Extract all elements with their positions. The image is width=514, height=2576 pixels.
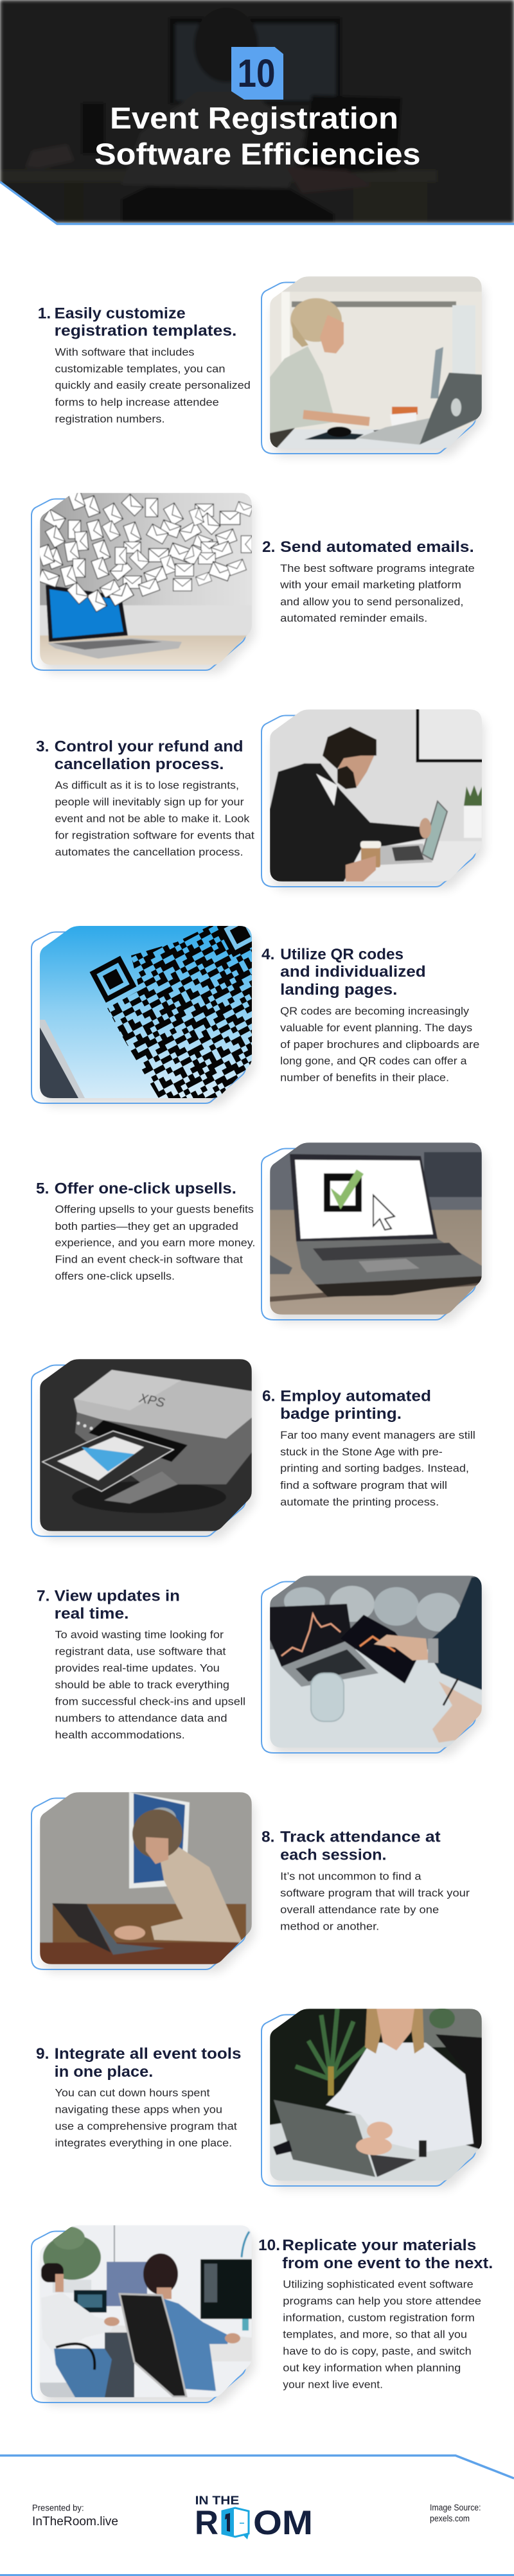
item 9 body text: You can cut down hours spent <box>55 2087 210 2099</box>
item 7 <box>37 1576 484 1755</box>
item 3 <box>36 706 488 889</box>
item 7 body text: health accommodations. <box>55 1729 185 1741</box>
item 4 heading: and individualized <box>280 963 426 981</box>
item 10 body text: information, custom registration form <box>283 2312 475 2323</box>
item 9 body text <box>55 2087 237 2149</box>
image source credit <box>430 2503 481 2523</box>
item 5 body text: experience, and you earn more money. <box>55 1238 255 1249</box>
item 9 body text: use a comprehensive program that <box>55 2120 237 2132</box>
item 2 body text: with your email marketing platform <box>279 580 461 591</box>
item 8 heading: 8. <box>261 1829 274 1846</box>
item 9 body text: integrates everything in one place. <box>55 2137 232 2149</box>
item 1 heading <box>38 305 236 340</box>
item 1 body text: customizable templates, you can <box>55 364 225 375</box>
item 10 body text: programs can help you store attendee <box>283 2296 481 2307</box>
logo: In The Room: R <box>195 2504 218 2542</box>
item 4 heading: Utilize QR codes <box>280 946 403 963</box>
item 5 body text: Find an event check-in software that <box>55 1254 243 1266</box>
item 1 body text: With software that includes <box>55 346 194 358</box>
item 2 body text: and allow you to send personalized, <box>280 596 463 608</box>
item 3 body text: automates the cancellation process. <box>55 847 244 858</box>
title <box>94 101 421 171</box>
item 8 heading: each session. <box>280 1846 387 1863</box>
item 2 photo: envelopes flying from laptop <box>31 488 254 673</box>
item 2 heading: 2. <box>262 538 275 556</box>
header background photo <box>0 0 514 223</box>
item 4 body text: QR codes are becoming increasingly <box>280 1006 470 1017</box>
item 6 heading: 6. <box>262 1387 275 1405</box>
item 1 <box>38 276 484 456</box>
item 8 body text: method or another. <box>280 1921 379 1932</box>
item 5 heading: Offer one-click upsells. <box>55 1180 236 1197</box>
footer top rule <box>0 2456 514 2478</box>
item 7 heading <box>37 1587 180 1622</box>
item 1 photo: woman at laptop <box>261 276 484 456</box>
item 10 photo: developers at monitors <box>31 2225 254 2405</box>
item 4 <box>31 914 479 1106</box>
item 10 body text: your next live event. <box>283 2379 383 2390</box>
item 8 body text: It’s not uncommon to find a <box>280 1870 422 1882</box>
item 4 heading <box>261 946 426 999</box>
item 3 body text <box>55 780 254 858</box>
presented by credit: InTheRoom.live <box>32 2515 118 2528</box>
item 9 <box>36 2008 484 2189</box>
item 6 photo: photo printer <box>31 1359 254 1539</box>
item 2 body text: The best software programs integrate <box>280 563 475 574</box>
item 1 body text: quickly and easily create personalized <box>55 380 251 391</box>
item 6 heading: badge printing. <box>280 1405 402 1423</box>
item 5 heading: 5. <box>36 1180 49 1197</box>
item 8 body text: software program that will track your <box>280 1888 470 1899</box>
item 7 body text: To avoid wasting time looking for <box>55 1629 224 1640</box>
item 3 body text: for registration software for events that <box>55 830 254 841</box>
item 4 heading: landing pages. <box>280 981 397 999</box>
item 9 heading: Integrate all event tools <box>55 2045 241 2063</box>
item 7 body text: numbers to attendance data and <box>55 1713 227 1725</box>
logo: In The Room <box>195 2494 313 2542</box>
item 2 body text: automated reminder emails. <box>280 613 427 625</box>
item 4 body text: of paper brochures and clipboards are <box>280 1039 479 1051</box>
presented by credit <box>32 2503 118 2528</box>
item 6 <box>31 1359 475 1539</box>
item 10 heading: from one event to the next. <box>282 2255 493 2272</box>
item 2 body text <box>279 563 475 625</box>
item 7 body text: from successful check-ins and upsell <box>55 1696 245 1708</box>
item 2 <box>31 488 475 673</box>
item 4 body text: number of benefits in their place. <box>280 1072 449 1084</box>
item 7 body text: registrant data, use software that <box>55 1646 226 1658</box>
number badge <box>231 47 283 100</box>
item 1 heading: 1. <box>38 305 51 322</box>
item 10 body text: out key information when planning <box>283 2362 461 2374</box>
item 3 heading: Control your refund and <box>55 738 244 756</box>
item 3 body text: event and not be able to make it. Look <box>55 813 250 824</box>
item 10 <box>31 2225 493 2405</box>
item 6 body text: Far too many event managers are still <box>280 1430 475 1441</box>
item 9 photo: woman with laptop and plant <box>261 2008 484 2189</box>
title: Software Efficiencies <box>94 137 421 171</box>
item 8 body text: overall attendance rate by one <box>280 1905 439 1916</box>
item 4 body text: long gone, and QR codes can offer a <box>280 1056 467 1067</box>
item 10 heading <box>258 2237 493 2272</box>
item 9 body text: navigating these apps when you <box>55 2104 222 2116</box>
item 3 photo: man with laptop and coffee <box>261 706 488 889</box>
item 10 body text: Utilizing sophisticated event software <box>283 2279 474 2291</box>
item 1 heading: Easily customize <box>55 305 186 322</box>
item 9 heading: 9. <box>36 2045 49 2063</box>
item 3 body text: people will inevitably sign up for your <box>55 797 244 808</box>
item 5 body text: both parties—they get an upgraded <box>55 1221 238 1232</box>
presented by credit: Presented by: <box>32 2503 84 2513</box>
item 6 body text <box>280 1430 475 1508</box>
item 7 heading: 7. <box>37 1587 49 1604</box>
item 5 body text <box>55 1204 255 1283</box>
item 8 photo: woman typing at table <box>31 1792 254 1972</box>
footer bottom rule <box>0 2574 514 2576</box>
item 7 heading: real time. <box>55 1605 128 1622</box>
logo: In The Room: OM <box>253 2504 313 2542</box>
item 1 body text: forms to help increase attendee <box>55 396 219 408</box>
item 4 body text: valuable for event planning. The days <box>280 1022 472 1034</box>
item 10 heading: Replicate your materials <box>282 2237 476 2254</box>
number badge: 10 <box>238 51 275 95</box>
item 8 body text <box>280 1870 470 1932</box>
item 6 body text: automate the printing process. <box>280 1497 439 1508</box>
item 5 body text: offers one-click upsells. <box>55 1271 175 1283</box>
item 7 photo: stock charts on laptop and tablet <box>261 1576 484 1755</box>
item 10 body text <box>283 2279 481 2390</box>
image source credit: Image Source: <box>430 2503 481 2512</box>
item 1 body text: registration numbers. <box>55 414 165 425</box>
item 7 body text: should be able to track everything <box>55 1679 229 1691</box>
item 6 heading: Employ automated <box>280 1387 431 1405</box>
item 5 photo: laptop with checkbox <box>261 1142 484 1322</box>
header accent edge <box>0 182 514 224</box>
item 3 heading: cancellation process. <box>55 756 224 773</box>
item 2 heading: Send automated emails. <box>280 538 474 556</box>
image source credit: pexels.com <box>430 2514 470 2523</box>
item 8 heading <box>261 1829 441 1863</box>
item 9 heading <box>36 2045 242 2081</box>
footer <box>0 2456 514 2576</box>
item 1 body text <box>55 346 251 425</box>
item 7 body text: provides real-time updates. You <box>55 1663 220 1674</box>
header banner <box>0 0 514 224</box>
item 3 heading: 3. <box>36 738 49 756</box>
item 6 photo: photo printer: XPS <box>137 1391 166 1410</box>
item 8 heading: Track attendance at <box>280 1829 441 1846</box>
item 6 heading <box>262 1387 431 1423</box>
item 3 body text: As difficult as it is to lose registrants, <box>55 780 239 792</box>
item 4 photo: QR code <box>31 914 260 1106</box>
item 4 body text <box>280 1006 479 1084</box>
item 6 body text: printing and sorting badges. Instead, <box>280 1463 469 1475</box>
item 10 body text: have to do is copy, paste, and switch <box>283 2346 472 2358</box>
item 6 body text: stuck in the Stone Age with pre- <box>280 1446 443 1458</box>
item 3 heading <box>36 738 244 773</box>
item 5 <box>36 1142 484 1322</box>
logo: In The Room: IN THE <box>195 2494 239 2507</box>
title: Event Registration <box>110 101 398 135</box>
item 1 heading: registration templates. <box>55 323 236 340</box>
item 4 heading: 4. <box>261 946 274 963</box>
item 10 body text: templates, and more, so that all you <box>283 2329 467 2341</box>
item 9 heading: in one place. <box>55 2063 153 2081</box>
item 6 body text: find a software program that will <box>280 1480 447 1491</box>
item 10 heading: 10. <box>258 2237 280 2254</box>
item 7 body text <box>55 1629 245 1741</box>
item 7 heading: View updates in <box>55 1587 180 1604</box>
item 8 <box>31 1792 470 1972</box>
item 5 body text: Offering upsells to your guests benefits <box>55 1204 254 1216</box>
